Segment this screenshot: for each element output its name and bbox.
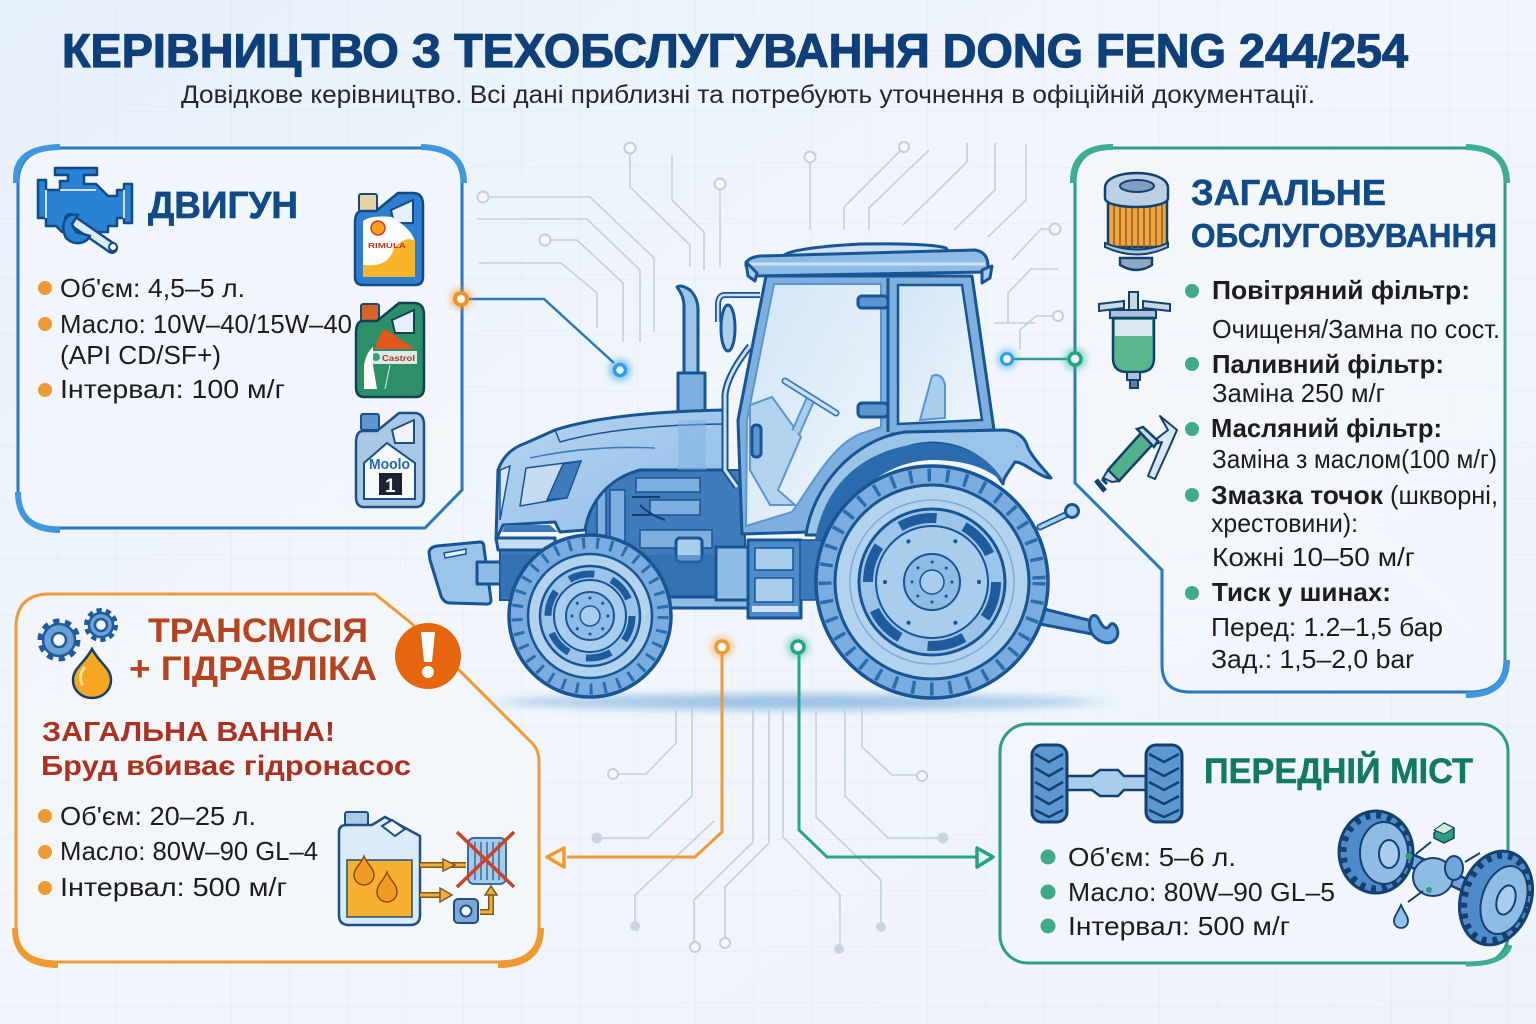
warning text: ЗАГАЛЬНА ВАННА! <box>42 716 335 747</box>
icon: warning <box>395 623 461 689</box>
heading line 2: + ГІДРАВЛІКА <box>129 650 377 688</box>
circuit lines background, top <box>477 142 1063 350</box>
heading: ДВИГУН <box>148 185 298 227</box>
rear wheel <box>816 466 1048 698</box>
warning text: Бруд вбиває гідронасос <box>41 750 411 781</box>
maintenance list <box>1185 275 1500 674</box>
connector: engine to tractor <box>450 288 631 381</box>
engine bay <box>500 470 750 608</box>
spec list <box>38 801 318 902</box>
front wheel <box>509 535 671 697</box>
spec list: Масло: 80W–90 GL–5 <box>1068 877 1335 907</box>
panel: transmission and hydraulics <box>15 594 541 965</box>
spec list: (API CD/SF+) <box>60 340 221 370</box>
tractor illustration <box>429 244 1118 698</box>
icon: air filter <box>1105 173 1168 270</box>
spec list: Об'єм: 4,5–5 л. <box>60 273 245 303</box>
connector: front axle to tractor <box>787 636 993 867</box>
spec list: Масло: 10W–40/15W–40 <box>60 309 352 339</box>
right window <box>898 285 982 424</box>
rear hitch arms <box>1040 504 1118 643</box>
icon: mobil oil jug: Moolo <box>369 456 410 473</box>
heading line 2: ОБСЛУГОВУВАННЯ <box>1191 217 1497 254</box>
maintenance list: Масляний фільтр: <box>1211 413 1442 443</box>
icon: oil drop <box>73 649 111 698</box>
connector: general maintenance to tractor <box>997 348 1086 370</box>
panel border <box>15 594 541 965</box>
heading: ТРАНСМІСІЯ <box>148 612 368 650</box>
warning text <box>41 716 411 781</box>
spec list <box>38 273 352 404</box>
maintenance list: хрестовини): <box>1211 508 1358 538</box>
icon: castrol oil jug: Castrol <box>382 354 415 363</box>
maintenance list: Заміна 250 м/г <box>1212 378 1385 408</box>
maintenance list: Зад.: 1,5–2,0 bar <box>1211 644 1414 674</box>
spec list: Об'єм: 20–25 л. <box>60 801 256 831</box>
roof <box>746 244 992 283</box>
panel: front axle <box>1000 724 1536 964</box>
left window and door <box>746 284 881 526</box>
spec list <box>1040 842 1335 941</box>
maintenance list: Тиск у шинах: <box>1212 577 1391 607</box>
steps and tank <box>716 540 830 618</box>
circuit lines background, bottom <box>592 707 948 954</box>
maintenance list: Змазка точок <box>1211 480 1384 510</box>
maintenance list: Перед: 1.2–1,5 бар <box>1211 612 1443 642</box>
panel border <box>1000 724 1510 964</box>
grab rail <box>725 346 750 487</box>
subtitle: Довідкове керівництво. Всі дані приблизні та потребують уточнення в офіційній документації. <box>181 81 1315 109</box>
maintenance list: Заміна з маслом(100 м/г) <box>1212 444 1497 474</box>
heading: ПЕРЕДНІЙ МІСТ <box>1204 751 1473 791</box>
spec list: Об'єм: 5–6 л. <box>1068 842 1236 872</box>
panel border <box>1073 147 1507 695</box>
title: КЕРІВНИЦТВО З ТЕХОБСЛУГУВАННЯ DONG FENG 244/254 <box>62 24 1408 77</box>
steering wheel <box>796 398 811 432</box>
panel: general maintenance <box>1073 147 1507 695</box>
icon: axle with tyres <box>1032 745 1182 822</box>
icon: engine with wrench <box>38 168 132 251</box>
seat <box>750 397 801 505</box>
icon: castrol oil jug <box>356 303 424 397</box>
maintenance list: Очищеня/Замна по сост. <box>1212 314 1500 344</box>
exhaust stack <box>677 286 705 413</box>
icon: mobil oil jug <box>356 413 424 507</box>
hood <box>496 410 727 550</box>
icon: fuel filter <box>1099 292 1170 388</box>
cab <box>718 276 994 534</box>
icon: axle service diagram <box>1339 811 1536 954</box>
maintenance list: (шкворні, <box>1390 480 1498 510</box>
icon: shell oil jug: RIMULA <box>368 241 407 250</box>
maintenance list: Паливний фільтр: <box>1212 349 1444 379</box>
maintenance list: Повітряний фільтр: <box>1212 275 1470 305</box>
spec list: Інтервал: 500 м/г <box>1068 911 1290 941</box>
rear fender <box>806 430 1051 540</box>
panel: engine <box>16 147 464 530</box>
front weight <box>429 542 509 604</box>
ground shadow <box>465 692 1135 712</box>
spec list: Масло: 80W–90 GL–4 <box>60 836 318 866</box>
icon: shell oil jug <box>355 193 423 285</box>
door handle <box>752 425 761 457</box>
icon: contaminated oil diagram <box>339 812 514 925</box>
heading: ЗАГАЛЬНЕ <box>1191 172 1386 213</box>
icon: mobil oil jug: 1 <box>385 476 396 497</box>
panel border <box>16 147 464 530</box>
mirror <box>718 295 760 322</box>
icon: gears <box>41 611 115 658</box>
connector: transmission to tractor <box>547 636 733 867</box>
maintenance list: Кожні 10–50 м/г <box>1212 542 1415 572</box>
icon: grease gun <box>1096 416 1177 491</box>
spec list: Інтервал: 100 м/г <box>60 374 285 404</box>
spec list: Інтервал: 500 м/г <box>60 872 287 902</box>
